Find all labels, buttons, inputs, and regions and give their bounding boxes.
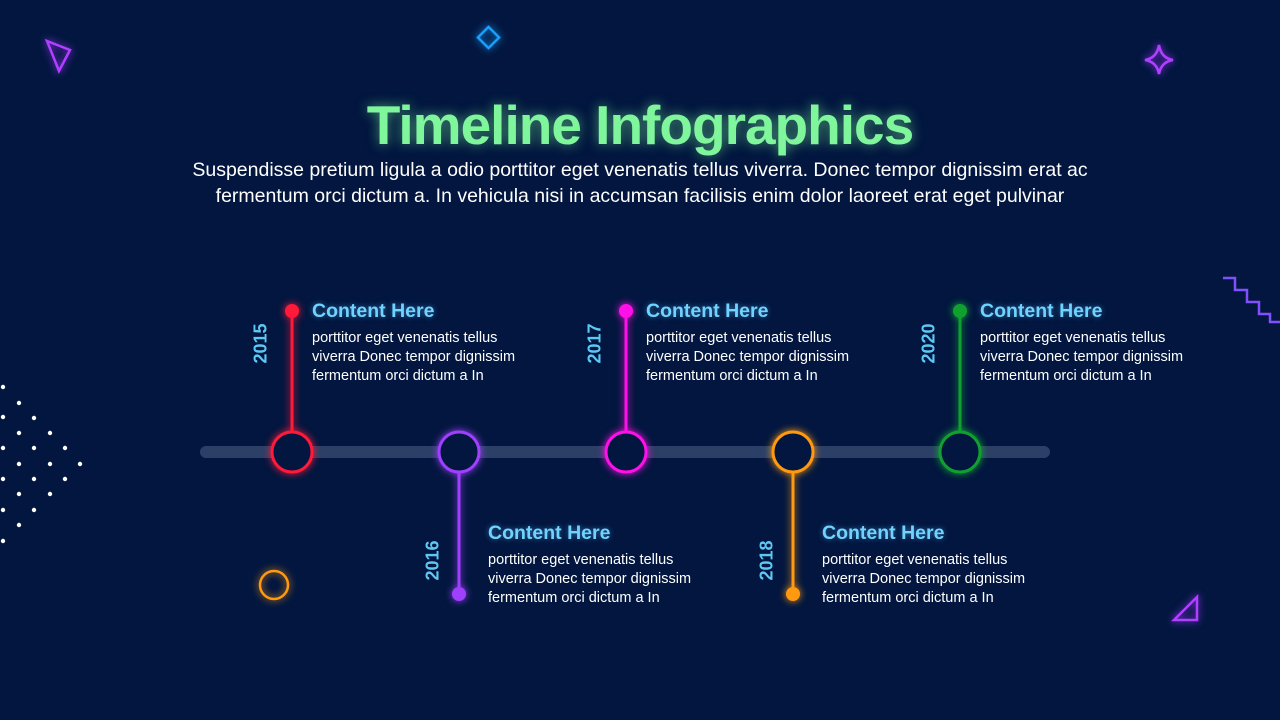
text block 2020: viverra Donec tempor dignissim [980, 349, 1183, 365]
text block 2015 [310, 300, 515, 384]
title: Timeline Infographics [367, 94, 913, 156]
text block 2017: Content Here [646, 300, 768, 322]
text block 2015: fermentum orci dictum a In [312, 368, 484, 384]
text block 2020: Content Here [980, 300, 1102, 322]
subtitle [192, 159, 1088, 207]
text block 2016: Content Here [488, 522, 610, 544]
text block 2017: viverra Donec tempor dignissim [646, 349, 849, 365]
subtitle: fermentum orci dictum a. In vehicula nisi in accumsan facilisis enim dolor laoreet erat eget pulvinar [216, 185, 1064, 207]
text block 2017 [644, 300, 849, 384]
text block 2015: Content Here [312, 300, 434, 322]
text block 2018: porttitor eget venenatis tellus [822, 552, 1007, 568]
icon: triangle bottom-right [1174, 597, 1197, 620]
text block 2020: porttitor eget venenatis tellus [980, 330, 1165, 346]
text block 2018: Content Here [822, 522, 944, 544]
dot pattern [1, 385, 82, 543]
marker 2018 [773, 432, 813, 601]
marker 2015 [272, 304, 312, 472]
text block 2020: fermentum orci dictum a In [980, 368, 1152, 384]
subtitle: Suspendisse pretium ligula a odio porttitor eget venenatis tellus viverra. Donec tempor dignissim erat ac [192, 159, 1088, 181]
marker 2017 [606, 304, 646, 472]
icon: triangle top-left [47, 41, 70, 71]
icon: sparkle [1145, 45, 1173, 74]
text block 2018: fermentum orci dictum a In [822, 590, 994, 606]
marker 2016 [439, 432, 479, 601]
text block 2018 [820, 522, 1025, 606]
text block 2016: viverra Donec tempor dignissim [488, 571, 691, 587]
year 2017: 2017 [584, 323, 604, 364]
year 2018: 2018 [756, 540, 776, 581]
text block 2015: viverra Donec tempor dignissim [312, 349, 515, 365]
marker 2020 [940, 304, 980, 472]
text block 2015: porttitor eget venenatis tellus [312, 330, 497, 346]
text block 2018: viverra Donec tempor dignissim [822, 571, 1025, 587]
timeline bar [206, 446, 1044, 458]
year 2015: 2015 [250, 323, 270, 364]
icon: orange ring [260, 571, 288, 599]
text block 2020 [978, 300, 1183, 384]
text block 2016: porttitor eget venenatis tellus [488, 552, 673, 568]
year 2020: 2020 [918, 323, 938, 364]
text block 2017: fermentum orci dictum a In [646, 368, 818, 384]
text block 2017: porttitor eget venenatis tellus [646, 330, 831, 346]
icon: zigzag stairs [1223, 278, 1280, 322]
icon: diamond [478, 27, 499, 48]
text block 2016: fermentum orci dictum a In [488, 590, 660, 606]
year 2016: 2016 [422, 540, 442, 581]
text block 2016 [486, 522, 691, 606]
